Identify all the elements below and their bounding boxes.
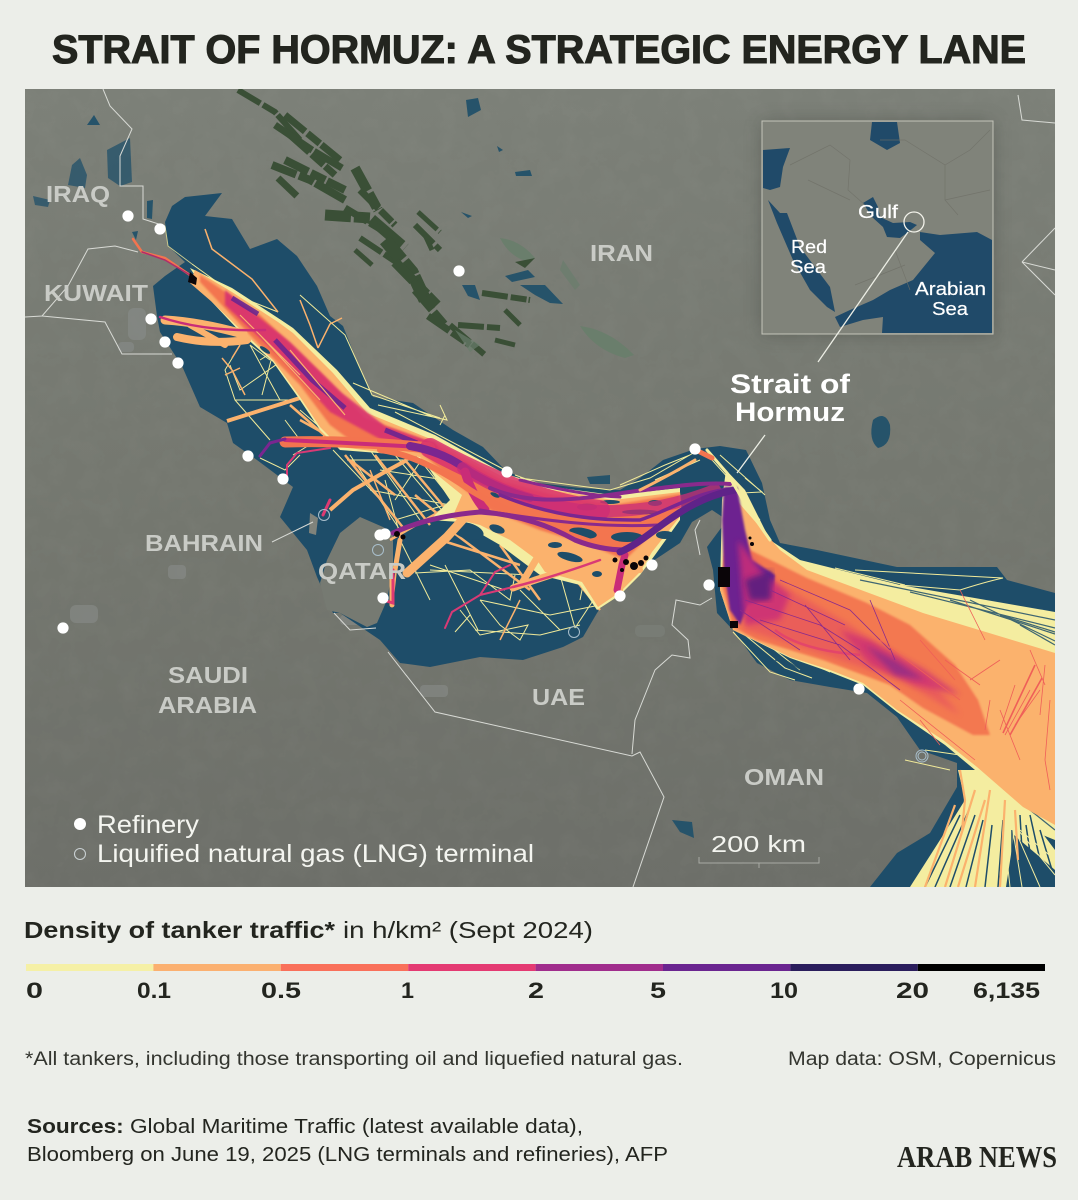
traffic: lanes to the Strait bbox=[133, 239, 770, 628]
bottom ship fan bbox=[910, 770, 1055, 887]
country labels: KUWAIT bbox=[44, 280, 148, 306]
inset locator map: Gulf bbox=[858, 202, 899, 222]
colour scale labels: 0.5 bbox=[261, 978, 301, 1003]
map legend: Refinery bbox=[97, 811, 200, 839]
colour scale labels: 1 bbox=[401, 978, 414, 1003]
colour scale labels: 5 bbox=[650, 978, 666, 1003]
country labels: IRAN bbox=[590, 240, 653, 266]
panel: map bbox=[25, 89, 1055, 887]
land base bbox=[25, 89, 1055, 887]
country labels: OMAN bbox=[744, 764, 824, 790]
inset locator map: Arabian bbox=[915, 279, 986, 299]
sea: Gulf and Gulf of Oman bbox=[153, 193, 1055, 887]
leader: Bahrain bbox=[272, 522, 313, 542]
traffic: sea holes between routes bbox=[259, 345, 674, 577]
label: Strait of Hormuz bbox=[731, 374, 850, 422]
country labels: ARABIA bbox=[158, 692, 257, 718]
LNG terminals bbox=[318, 510, 928, 762]
inset locator map: Sea bbox=[932, 299, 969, 319]
lakes and marshes bbox=[33, 98, 890, 838]
traffic: Gulf of Oman envelope bbox=[720, 470, 1055, 887]
colour scale labels bbox=[26, 978, 1040, 1003]
title: STRAIT OF HORMUZ: A STRATEGIC ENERGY LANE bbox=[52, 28, 1026, 72]
tanker traffic density bbox=[133, 229, 1055, 887]
country labels: BAHRAIN bbox=[145, 530, 263, 556]
leader: Strait label bbox=[737, 435, 765, 473]
inset locator map: Red bbox=[791, 237, 827, 257]
sources: Sources: Global Maritime Traffic (latest available data), bbox=[27, 1115, 583, 1138]
colour scale labels: 2 bbox=[528, 978, 544, 1003]
traffic: northern Gulf corridor bbox=[190, 268, 682, 610]
inset locator map: Sea bbox=[790, 257, 827, 277]
legend heading: Density of tanker traffic* bbox=[24, 917, 335, 943]
leader: inset to Strait bbox=[818, 232, 908, 362]
colour scale labels: 20 bbox=[896, 978, 929, 1003]
colour scale bar bbox=[26, 964, 1045, 971]
label: Strait of Hormuz: Strait of bbox=[730, 369, 851, 399]
vegetation: Zagros mountains bbox=[238, 90, 634, 358]
borders bbox=[25, 89, 1055, 887]
colour scale labels: 10 bbox=[770, 978, 798, 1003]
legend heading bbox=[24, 917, 593, 943]
inset map shadow bbox=[762, 121, 993, 334]
sources bbox=[27, 1115, 668, 1166]
sources: Bloomberg on June 19, 2025 (LNG terminals and refineries), AFP bbox=[27, 1143, 668, 1166]
colour scale labels: 0 bbox=[26, 978, 43, 1003]
label: Strait of Hormuz: Hormuz bbox=[735, 397, 845, 427]
traffic: thin route web bbox=[192, 229, 1003, 770]
footnote: *All tankers, including those transporting oil and liquefied natural gas. bbox=[25, 1049, 683, 1070]
traffic: densest anchorages bbox=[188, 272, 754, 628]
map legend: Liquified natural gas (LNG) terminal bbox=[97, 840, 534, 868]
country labels: IRAQ bbox=[46, 181, 110, 207]
scale bar: 200 km bbox=[711, 831, 806, 857]
refineries bbox=[57, 210, 865, 695]
land: Qatar peninsula bbox=[320, 517, 393, 627]
country labels: UAE bbox=[532, 684, 585, 710]
map data credit: Map data: OSM, Copernicus bbox=[788, 1049, 1056, 1070]
scale bar bbox=[698, 835, 820, 868]
country labels: SAUDI bbox=[168, 662, 248, 688]
inset locator map bbox=[762, 121, 993, 334]
land: Bahrain bbox=[309, 513, 318, 535]
colour scale labels: 6,135 bbox=[973, 978, 1040, 1003]
colour scale labels: 0.1 bbox=[137, 978, 171, 1003]
map legend bbox=[74, 811, 534, 868]
country labels bbox=[44, 181, 824, 790]
legend heading: in h/km² (Sept 2024) bbox=[343, 917, 593, 943]
country labels: QATAR bbox=[318, 558, 406, 584]
